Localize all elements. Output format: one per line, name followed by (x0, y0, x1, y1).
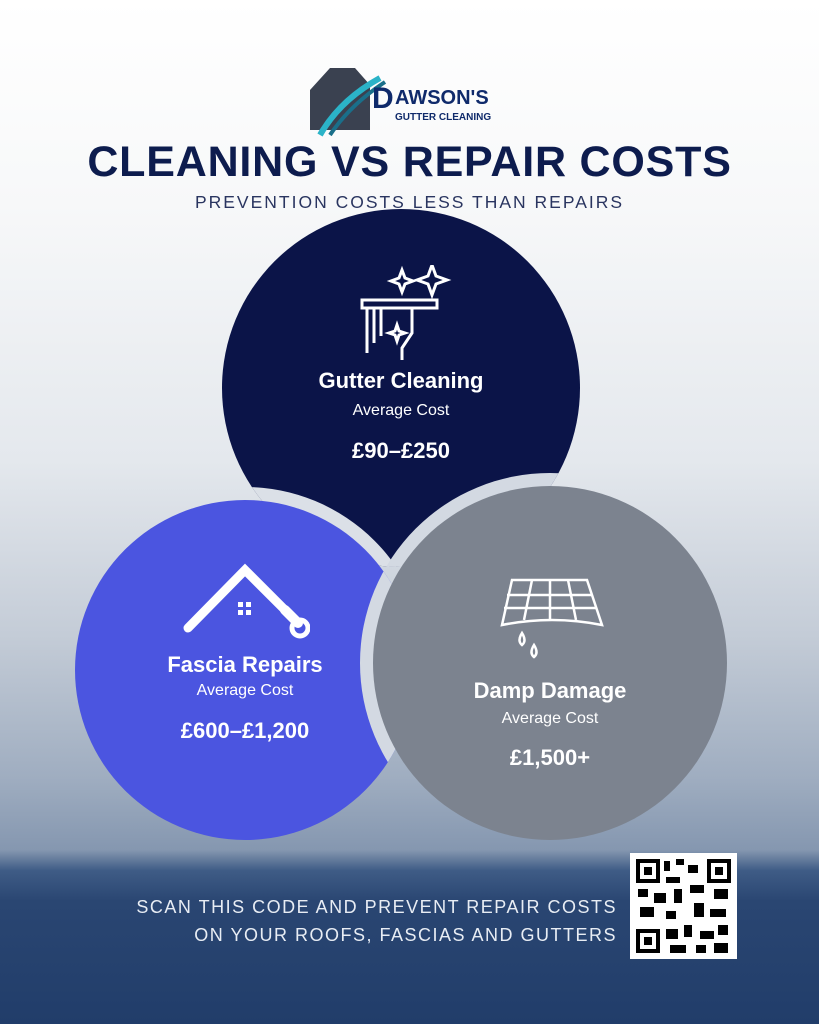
panel: damp damage (474, 578, 626, 770)
icon: roof tiles drops (500, 578, 604, 658)
call to action text: ON YOUR ROOFS, FASCIAS AND GUTTERS (194, 925, 617, 945)
panel: damp damage: Damp Damage (474, 678, 626, 703)
panel: fascia repairs (167, 564, 323, 743)
call to action text (136, 897, 617, 945)
logo: AWSON'S (395, 87, 489, 109)
logo: GUTTER CLEANING (395, 112, 491, 123)
icon: house wrench (184, 564, 310, 638)
logo (310, 68, 491, 136)
panel: fascia repairs: £600–£1,200 (181, 718, 309, 743)
panel: damp damage: Average Cost (502, 710, 598, 727)
title: CLEANING VS REPAIR COSTS (87, 138, 732, 186)
call to action text: SCAN THIS CODE AND PREVENT REPAIR COSTS (136, 897, 617, 917)
panel: gutter cleaning: £90–£250 (352, 438, 450, 463)
icon: gutter sparkle (360, 265, 452, 360)
subtitle: PREVENTION COSTS LESS THAN REPAIRS (195, 192, 624, 212)
panel: gutter cleaning: Gutter Cleaning (318, 368, 484, 393)
circles diagram (75, 209, 727, 840)
panel: fascia repairs: Fascia Repairs (167, 652, 323, 677)
panel: fascia repairs: Average Cost (197, 682, 293, 699)
panel: damp damage: £1,500+ (510, 745, 590, 770)
panel: gutter cleaning (318, 265, 484, 463)
QR code (630, 853, 737, 959)
panel: gutter cleaning: Average Cost (353, 402, 449, 419)
logo: D (372, 82, 394, 115)
